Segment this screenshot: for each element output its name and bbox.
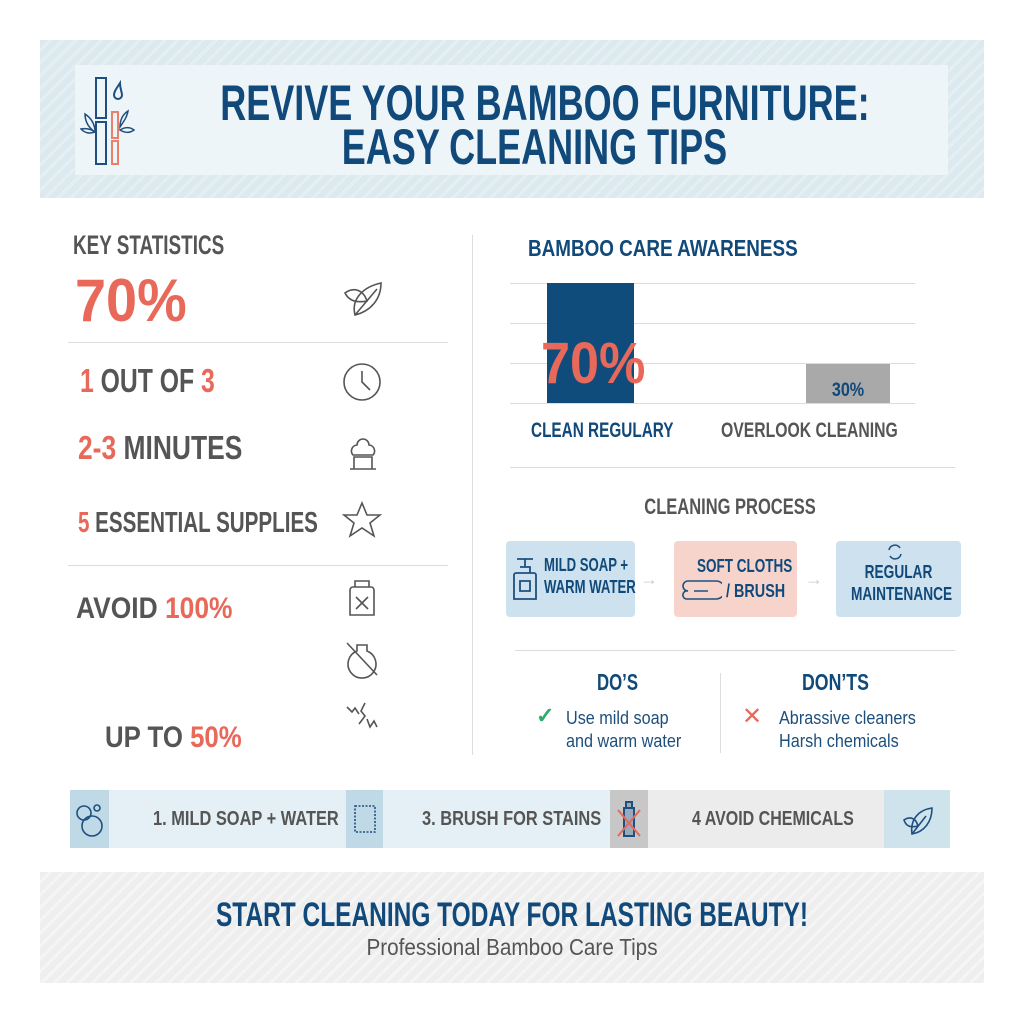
vertical divider [472,235,473,755]
icons column [342,282,382,729]
do's and don'ts: Use mild soap [566,708,669,728]
step 3: REGULAR [865,562,932,582]
do's and don'ts: ✕ [742,703,762,730]
tip 1: 1. MILD SOAP + WATER [153,808,339,830]
title text: EASY CLEANING TIPS [342,119,727,175]
step 1: MILD SOAP + [544,555,628,575]
step 1 [506,541,635,617]
step 2: SOFT CLOTHS [697,556,792,576]
step 1: WARM WATER [544,577,636,597]
stat supplies: 5 ESSENTIAL SUPPLIES [78,507,318,539]
do's and don'ts: ✓ [536,703,554,728]
arrow: → [805,569,823,589]
don'ts: DON’TS [802,669,869,695]
heading: KEY STATISTICS [73,230,224,260]
bottom tips strip [70,790,950,848]
title box [75,65,948,175]
icon: leaf [884,790,950,848]
title text [220,75,870,175]
bar value 30%: 30% [832,380,864,401]
do's and don'ts: and warm water [566,731,681,751]
do's: DO’S [597,669,638,695]
panel: bar chart [510,235,915,442]
stat up to 50: UP TO 50% [105,721,242,754]
footer subtitle: Professional Bamboo Care Tips [366,934,658,960]
panel: key statistics [68,230,448,754]
heading: CLEANING PROCESS [644,494,816,519]
bar label: OVERLOOK CLEANING [721,419,898,442]
tip 3: 3. BRUSH FOR STAINS [422,808,601,830]
icon: bamboo [80,77,136,165]
header band [40,40,984,198]
step 3: MAINTENANCE [851,584,952,604]
bar: clean regularly [547,283,634,403]
stat minutes: 2-3 MINUTES [78,429,242,466]
icon: no chemicals [610,790,648,848]
tip 4: 4 AVOID CHEMICALS [692,808,854,830]
step 2 [674,541,797,617]
bar value 70%: 70% [541,331,645,396]
do's and don'ts: Harsh chemicals [779,731,899,751]
icon: bubbles [70,790,109,848]
step 3 [836,541,961,617]
footer headline: START CLEANING TODAY FOR LASTING BEAUTY! [216,896,808,934]
step 2: / BRUSH [726,581,785,601]
do's and don'ts [536,669,916,753]
arrow: → [640,569,658,589]
stat 70%: 70% [75,267,187,334]
icon: cloth [346,790,383,848]
title text: REVIVE YOUR BAMBOO FURNITURE: [220,75,870,131]
cleaning process [506,494,961,617]
footer band [40,872,984,983]
stat avoid: AVOID 100% [76,592,233,625]
bar: overlook [806,364,890,403]
bar label: CLEAN REGULARY [531,419,674,442]
do's and don'ts: Abrassive cleaners [779,708,916,728]
stat 1 out of 3: 1 OUT OF 3 [80,362,215,399]
chart heading: BAMBOO CARE AWARENESS [528,235,798,261]
